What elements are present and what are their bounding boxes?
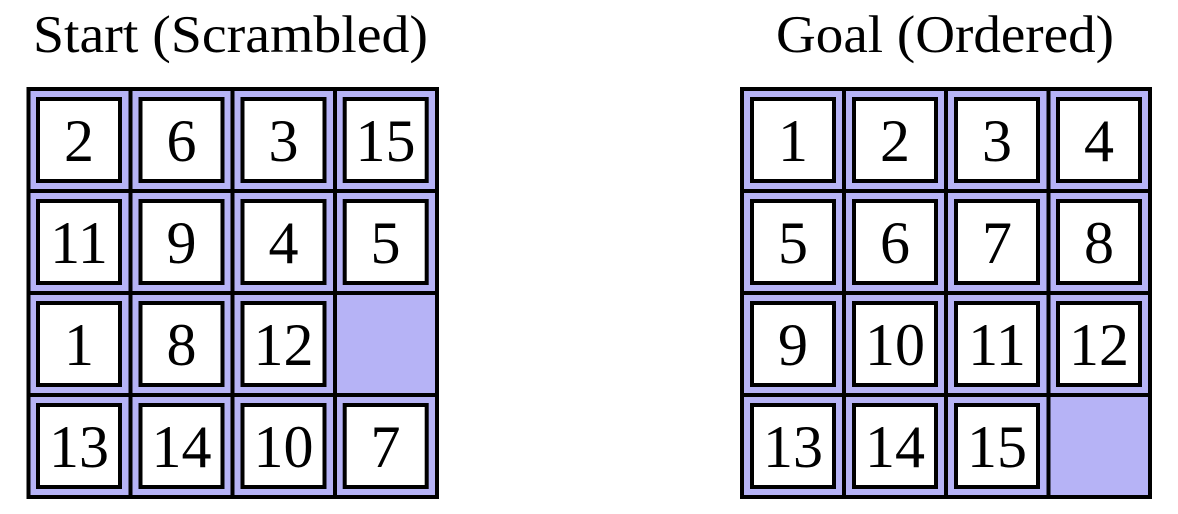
panel: goal grid: 3 bbox=[982, 108, 1012, 174]
panel: goal grid: 2 bbox=[880, 108, 910, 174]
panel: start grid: 14 bbox=[152, 414, 212, 480]
panel: goal grid: 1 bbox=[778, 108, 808, 174]
panel: goal grid: 7 bbox=[982, 210, 1012, 276]
panel: start grid: 10 bbox=[254, 414, 314, 480]
title: start: Start (Scrambled) bbox=[33, 6, 428, 64]
panel: start grid: 8 bbox=[166, 312, 196, 378]
panel: start grid: 7 bbox=[370, 414, 400, 480]
panel: start grid: 4 bbox=[268, 210, 298, 276]
panel: start grid: 12 bbox=[254, 312, 314, 378]
panel: start grid: 2 bbox=[64, 108, 94, 174]
panel: goal grid: 8 bbox=[1084, 210, 1114, 276]
panel: goal grid: 15 bbox=[967, 414, 1027, 480]
panel: goal grid: 5 bbox=[778, 210, 808, 276]
panel: goal grid bbox=[742, 89, 1150, 497]
panel: start grid: 5 bbox=[370, 210, 400, 276]
panel: goal grid: 4 bbox=[1084, 108, 1114, 174]
panel: start grid bbox=[28, 89, 437, 497]
panel: start grid: 1 bbox=[64, 312, 94, 378]
panel: goal grid: 12 bbox=[1069, 312, 1129, 378]
panel: start grid: 3 bbox=[268, 108, 298, 174]
panel: goal grid: 14 bbox=[865, 414, 925, 480]
panel: goal grid: 6 bbox=[880, 210, 910, 276]
panel: goal grid: 9 bbox=[778, 312, 808, 378]
panel: start grid: 11 bbox=[50, 210, 108, 276]
panel: goal grid: 10 bbox=[865, 312, 925, 378]
title: goal: Goal (Ordered) bbox=[776, 6, 1114, 64]
panel: start grid: 9 bbox=[166, 210, 196, 276]
panel: start grid: 15 bbox=[356, 108, 416, 174]
panel: start grid: 6 bbox=[166, 108, 196, 174]
panel: start grid: 13 bbox=[49, 414, 109, 480]
panel: goal grid: 13 bbox=[763, 414, 823, 480]
panel: goal grid: 11 bbox=[968, 312, 1026, 378]
